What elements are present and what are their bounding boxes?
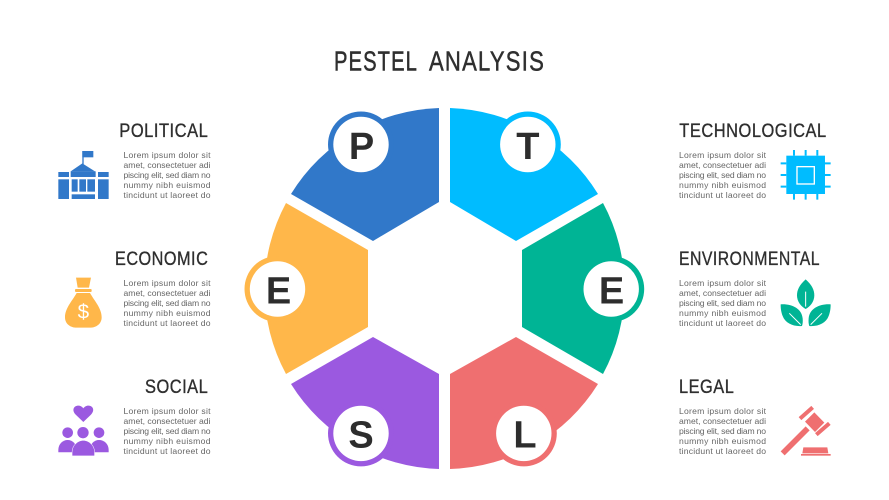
- panel: economic: [65, 248, 211, 328]
- text block: political: piscing elit, sed diam no: [124, 170, 211, 180]
- text block: legal: [679, 406, 767, 456]
- text block: political: amet, consectetuer adi: [124, 160, 211, 170]
- text block: economic: [124, 278, 211, 328]
- text block: social: piscing elit, sed diam no: [124, 426, 211, 436]
- text block: social: tincidunt ut laoreet do: [124, 446, 211, 456]
- text block: technological: tincidunt ut laoreet do: [679, 190, 766, 200]
- heading: economic: ECONOMIC: [115, 248, 208, 270]
- text block: social: Lorem ipsum dolor sit: [124, 406, 211, 416]
- text block: economic: nummy nibh euismod: [124, 308, 211, 318]
- title: [334, 46, 545, 77]
- text block: legal: piscing elit, sed diam no: [679, 426, 766, 436]
- segment: E environmental: E: [599, 270, 624, 312]
- panel: technological: [679, 120, 831, 200]
- panel: social: [58, 376, 211, 456]
- icon: gavel: [783, 407, 831, 456]
- text block: economic: tincidunt ut laoreet do: [124, 318, 211, 328]
- hexagonal wheel diagram: [244, 108, 644, 469]
- icon: three leaves: [781, 279, 831, 326]
- segment: P political: P: [349, 126, 374, 168]
- text block: social: [124, 406, 211, 456]
- text block: legal: amet, consectetuer adi: [679, 416, 766, 426]
- text block: legal: tincidunt ut laoreet do: [679, 446, 766, 456]
- heading: social: SOCIAL: [145, 376, 208, 398]
- text block: political: nummy nibh euismod: [124, 180, 211, 190]
- text block: economic: piscing elit, sed diam no: [124, 298, 211, 308]
- text block: environmental: nummy nibh euismod: [679, 308, 766, 318]
- text block: economic: amet, consectetuer adi: [124, 288, 211, 298]
- segment: P political: [291, 108, 439, 241]
- segment: T technological: [450, 108, 598, 241]
- text block: environmental: [679, 278, 767, 328]
- heading: technological: TECHNOLOGICAL: [679, 120, 827, 142]
- segment: E environmental: [522, 203, 644, 374]
- title: ANALYSIS: [429, 46, 545, 77]
- text block: technological: amet, consectetuer adi: [679, 160, 766, 170]
- segment: E economic: E: [266, 270, 291, 312]
- panel: legal: [679, 376, 831, 456]
- heading: political: POLITICAL: [119, 120, 208, 142]
- text block: environmental: Lorem ipsum dolor sit: [679, 278, 767, 288]
- heading: environmental: ENVIRONMENTAL: [679, 248, 820, 270]
- text block: legal: Lorem ipsum dolor sit: [679, 406, 767, 416]
- text block: environmental: tincidunt ut laoreet do: [679, 318, 766, 328]
- heading: legal: LEGAL: [679, 376, 734, 398]
- segment: S social: S: [348, 415, 374, 457]
- icon: government building: [58, 151, 109, 199]
- segment: L legal: L: [513, 415, 537, 457]
- segment: L legal: [450, 337, 598, 469]
- text block: social: amet, consectetuer adi: [124, 416, 211, 426]
- icon: money bag: $: [78, 301, 90, 324]
- text block: legal: nummy nibh euismod: [679, 436, 766, 446]
- text block: political: Lorem ipsum dolor sit: [124, 150, 211, 160]
- panel: political: [58, 120, 211, 200]
- text block: environmental: piscing elit, sed diam no: [679, 298, 766, 308]
- text block: technological: piscing elit, sed diam no: [679, 170, 766, 180]
- text block: technological: nummy nibh euismod: [679, 180, 766, 190]
- panel: environmental: [679, 248, 831, 328]
- text block: social: nummy nibh euismod: [124, 436, 211, 446]
- segment: E economic: [244, 203, 368, 374]
- title: PESTEL: [334, 46, 418, 77]
- segment: T technological: T: [516, 126, 539, 168]
- icon: money bag: [65, 278, 102, 328]
- icon: people with heart: [58, 406, 109, 456]
- icon: microchip: [781, 150, 831, 200]
- text block: technological: Lorem ipsum dolor sit: [679, 150, 767, 160]
- text block: political: tincidunt ut laoreet do: [124, 190, 211, 200]
- segment: S social: [291, 337, 439, 469]
- text block: environmental: amet, consectetuer adi: [679, 288, 766, 298]
- text block: political: [124, 150, 211, 200]
- text block: technological: [679, 150, 767, 200]
- text block: economic: Lorem ipsum dolor sit: [124, 278, 211, 288]
